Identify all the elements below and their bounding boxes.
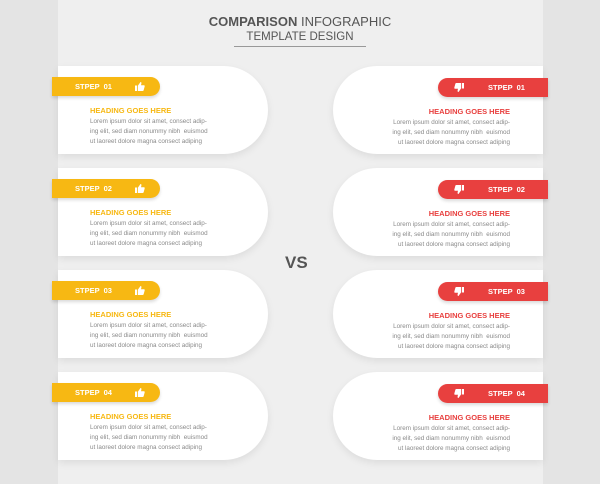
left tag 3: STPEP 03 [75, 286, 112, 295]
right text 4 [392, 425, 510, 452]
title: COMPARISON INFOGRAPHIC [209, 14, 391, 29]
right text 3: ing elit, sed diam nonummy nibh euismod [392, 333, 510, 340]
right text 2: ut laoreet dolore magna consect adiping [398, 241, 510, 248]
right tag 1: STPEP 01 [488, 83, 525, 92]
right tag 3 [438, 282, 548, 301]
left heading 1: HEADING GOES HERE [90, 106, 171, 115]
left tag 1 [52, 77, 160, 96]
left tag 2 [52, 179, 160, 198]
right text 1: ing elit, sed diam nonummy nibh euismod [392, 129, 510, 136]
left tag 3 [52, 281, 160, 300]
left heading 3: HEADING GOES HERE [90, 310, 171, 319]
right text 4: ut laoreet dolore magna consect adiping [398, 445, 510, 452]
right tag 2 [438, 180, 548, 199]
right heading 3: HEADING GOES HERE [429, 311, 510, 320]
left tag 4: STPEP 04 [75, 388, 112, 397]
left text 4: ing elit, sed diam nonummy nibh euismod [90, 434, 208, 441]
right text 3: Lorem ipsum dolor sit amet, consect adip- [393, 323, 510, 330]
left text 1: ut laoreet dolore magna consect adiping [90, 138, 202, 145]
right tag 1 [438, 78, 548, 97]
left card 2 [58, 168, 268, 256]
left card 4 [58, 372, 268, 460]
right text 1 [392, 119, 510, 146]
left tag 1: STPEP 01 [75, 82, 112, 91]
left text 3: Lorem ipsum dolor sit amet, consect adip- [90, 322, 207, 329]
right text 3: ut laoreet dolore magna consect adiping [398, 343, 510, 350]
left text 1: Lorem ipsum dolor sit amet, consect adip- [90, 118, 207, 125]
left text 1 [90, 118, 208, 145]
left text 4: ut laoreet dolore magna consect adiping [90, 444, 202, 451]
right card 3 [333, 270, 543, 358]
right heading 4: HEADING GOES HERE [429, 413, 510, 422]
right card 2 [333, 168, 543, 256]
right text 2 [392, 221, 510, 248]
right tag 4 [438, 384, 548, 403]
title [209, 14, 391, 47]
left tag 4 [52, 383, 160, 402]
right text 1: Lorem ipsum dolor sit amet, consect adip- [393, 119, 510, 126]
left text 4: Lorem ipsum dolor sit amet, consect adip- [90, 424, 207, 431]
right card 4 [333, 372, 543, 460]
right text 3 [392, 323, 510, 350]
right tag 3: STPEP 03 [488, 287, 525, 296]
left text 3: ut laoreet dolore magna consect adiping [90, 342, 202, 349]
left tag 2: STPEP 02 [75, 184, 112, 193]
left text 2: ut laoreet dolore magna consect adiping [90, 240, 202, 247]
right text 4: ing elit, sed diam nonummy nibh euismod [392, 435, 510, 442]
right text 2: ing elit, sed diam nonummy nibh euismod [392, 231, 510, 238]
vs label: VS [285, 253, 308, 272]
left card 1 [58, 66, 268, 154]
right text 4: Lorem ipsum dolor sit amet, consect adip- [393, 425, 510, 432]
title: TEMPLATE DESIGN [246, 31, 354, 43]
left heading 4: HEADING GOES HERE [90, 412, 171, 421]
right text 2: Lorem ipsum dolor sit amet, consect adip- [393, 221, 510, 228]
left text 2 [90, 220, 208, 247]
left heading 2: HEADING GOES HERE [90, 208, 171, 217]
left text 3: ing elit, sed diam nonummy nibh euismod [90, 332, 208, 339]
right heading 1: HEADING GOES HERE [429, 107, 510, 116]
right text 1: ut laoreet dolore magna consect adiping [398, 139, 510, 146]
left text 3 [90, 322, 208, 349]
left text 4 [90, 424, 208, 451]
right heading 2: HEADING GOES HERE [429, 209, 510, 218]
right tag 4: STPEP 04 [488, 389, 525, 398]
right card 1 [333, 66, 543, 154]
left card 3 [58, 270, 268, 358]
right tag 2: STPEP 02 [488, 185, 525, 194]
left text 2: ing elit, sed diam nonummy nibh euismod [90, 230, 208, 237]
left text 2: Lorem ipsum dolor sit amet, consect adip- [90, 220, 207, 227]
left text 1: ing elit, sed diam nonummy nibh euismod [90, 128, 208, 135]
